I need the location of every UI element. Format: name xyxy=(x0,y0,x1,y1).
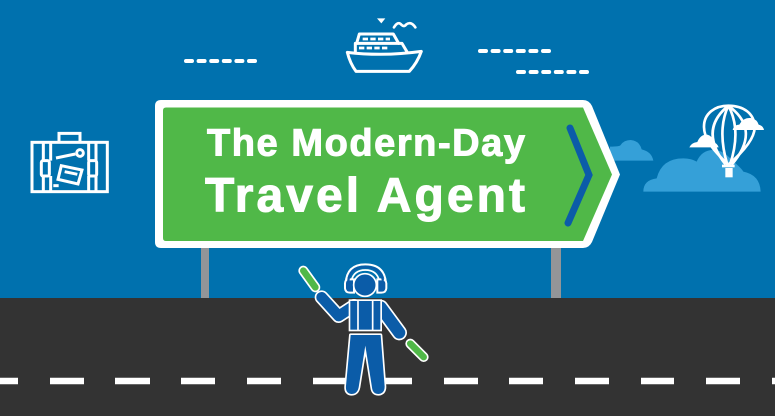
torso xyxy=(349,299,382,331)
sign posts xyxy=(201,246,561,298)
title xyxy=(205,122,525,222)
legs xyxy=(346,335,385,394)
head xyxy=(354,274,376,296)
traffic controller figure xyxy=(303,264,424,394)
dashed lines: left xyxy=(186,59,255,63)
title: Travel Agent xyxy=(205,170,525,222)
sign chevron xyxy=(568,128,589,223)
raised arm xyxy=(322,297,354,316)
road sign xyxy=(155,100,620,248)
left baton xyxy=(303,271,315,287)
lowered arm xyxy=(381,307,399,333)
title: The Modern-Day xyxy=(207,122,525,164)
birds xyxy=(394,23,415,27)
headset xyxy=(346,264,386,283)
icon: hot air balloon xyxy=(689,106,764,177)
icon: cruise ship xyxy=(347,18,421,71)
dashed lines: right xyxy=(480,51,588,72)
balloon cloud right xyxy=(733,118,764,130)
road xyxy=(0,298,775,416)
balloon cloud left xyxy=(689,135,719,147)
right baton xyxy=(410,344,424,357)
icon: suitcase xyxy=(32,133,107,192)
icon: clouds xyxy=(610,140,761,192)
